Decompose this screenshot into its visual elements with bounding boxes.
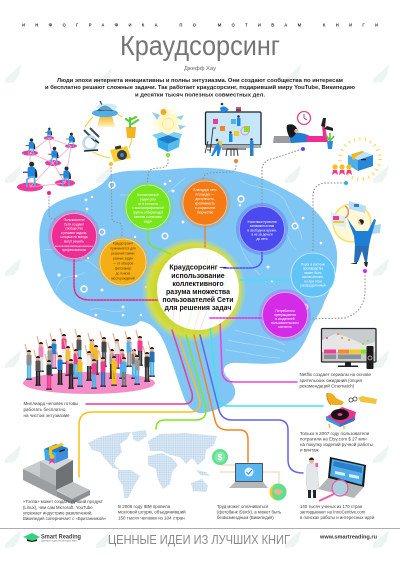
- brain circuit lines: [44, 178, 322, 358]
- panel: magenta circle: контента: [278, 325, 292, 329]
- panel: pink circle: сообщества: [65, 227, 83, 231]
- panel: yellow circle: решения самых: [111, 252, 135, 256]
- panel: violet circle: занимаются ими: [250, 224, 274, 228]
- central definition text: коллективного: [172, 281, 224, 288]
- colored leader lines: [79, 318, 323, 477]
- footer slogan: ЦЕННЫЕ ИДЕИ ИЗ ЛУЧШИХ КНИГ: [108, 533, 290, 547]
- panel: orange circle: [180, 178, 230, 228]
- icon: TV with chart: [322, 328, 376, 369]
- billion people note: работать бесплатно,: [24, 407, 67, 412]
- panel: pink circle: профессионалы: [62, 248, 87, 252]
- icon: ufo, cactus, camera, microscope cycle: [84, 101, 138, 162]
- pale fan lines: [172, 258, 228, 330]
- connector: network to pink circle: [49, 193, 60, 222]
- panel: yellow circle: Краудсорсинг: [113, 242, 134, 246]
- connector: icons to yellow circle: [111, 164, 122, 240]
- panel: yellow circle: применяется для: [110, 246, 136, 250]
- IBM note: В 2006 году IBM провела: [118, 504, 171, 509]
- Etsy note: на покупку изделий ручной работы: [300, 441, 373, 447]
- panel: green circle: Коллективный: [137, 193, 159, 197]
- central definition text: использование: [171, 273, 225, 280]
- panel: orange circle: доступность,: [195, 197, 215, 201]
- panel: cyan circle: но при этом: [304, 279, 322, 283]
- central definition text: для решения задач: [165, 305, 231, 312]
- InnoCentive note: 140 тысяч ученых из 170 стран: [300, 504, 363, 509]
- connector: screen to orange circle: [203, 162, 236, 180]
- Etsy note: и винтаж: [300, 448, 319, 453]
- icon: people network: [17, 128, 77, 192]
- panel: violet circle: до сети: [256, 237, 268, 241]
- panel: yellow circle: — от обзоров: [113, 262, 133, 266]
- logo: Smart Reading: [23, 533, 81, 542]
- icon: paid and free labour laptop: $: [218, 453, 223, 462]
- title: Краудсорсинг: [120, 30, 280, 61]
- Netflix note: Netflix создает сериалы на основе: [300, 372, 371, 377]
- Netflix note: зрительских ожиданий (опция: [300, 377, 363, 383]
- panel: orange circle: творчество: [197, 210, 213, 214]
- panel: orange circle: креативность: [195, 202, 215, 206]
- panel: green circle: группы отбирающей: [133, 211, 163, 215]
- panel: cyan circle: [291, 253, 335, 297]
- panel: orange circle: площадке —: [196, 192, 215, 196]
- panel: green circle: [122, 182, 174, 232]
- icon: big screen with workers: [205, 103, 261, 156]
- InnoCentive note: в поисках работы и интересных идей: [300, 515, 375, 520]
- panel: cyan circle: распределенный: [300, 284, 326, 288]
- InnoCentive note: заглядывают на InnoCentive.com: [300, 509, 366, 514]
- panel: magenta circle: превращаются: [274, 313, 296, 317]
- icon: scientist with laptop and magnifier: [306, 457, 366, 501]
- panel: yellow circle: месторождений: [111, 276, 135, 280]
- panel: pink circle: Сети создают: [64, 222, 85, 226]
- panel: violet circle: а не за деньги: [251, 233, 273, 237]
- panel: cyan circle: исключителен,: [302, 275, 324, 279]
- crowd product note: упрежает индустрию развлечений,: [23, 510, 92, 515]
- icon: woman with laptop and clock: [273, 112, 334, 149]
- intro text: [45, 77, 355, 99]
- icon: podium with box: [23, 443, 90, 504]
- billion people note: на чистом энтузиазме: [24, 413, 70, 418]
- labour note: безвозмездным (Википедия): [217, 515, 274, 520]
- panel: yellow circle: [96, 236, 150, 288]
- panel: pink circle: высококвалифицированные: [55, 244, 93, 248]
- crowd product note: (Linux), чем сам Microsoft. YouTube: [23, 505, 93, 510]
- website: www.smartreading.ru: [319, 534, 377, 540]
- panel: pink circle: могут решить: [64, 240, 84, 244]
- icon: turntable: [326, 393, 377, 429]
- panel: orange circle: и социальное: [195, 206, 215, 210]
- logo: Smart Reading: Ценные идеи из лучших книг: [41, 540, 77, 542]
- panel: green circle: разум сети: [140, 197, 156, 201]
- central definition text: разума множества: [166, 289, 230, 296]
- panel: orange circle: Благодаря сети: [194, 188, 217, 192]
- icon: box with medals and rays: [332, 139, 380, 179]
- crowd product note: «Толпа» может создать лучший продукт: [23, 499, 103, 504]
- panel: pink circle: и решают задачи,: [61, 231, 87, 235]
- Etsy note: потратили на Etsy.com $ 27 млн: [300, 437, 367, 442]
- IBM note: 150 тысяч человек из 104 стран: [118, 515, 185, 520]
- icon: lightbulb in box: [151, 106, 186, 152]
- brain shape: [39, 168, 337, 413]
- connector: bulb box to green circle: [147, 156, 168, 185]
- panel: violet circle: в свободное время,: [247, 228, 277, 232]
- panel: violet circle: [236, 203, 288, 255]
- connector: man to magenta circle: [310, 272, 365, 319]
- header tagline: ИНФОГРАФИКА ПО МОТИВАМ КНИГИ: [22, 22, 378, 28]
- connector: woman to violet circle: [262, 149, 302, 206]
- panel: yellow circle: фотокамер: [115, 266, 131, 270]
- connector: box to cyan circle: [313, 183, 345, 253]
- central definition text: пользователей Сети: [162, 296, 234, 304]
- icon: man with floating screens: [331, 201, 381, 267]
- panel: cyan circle: производства: [303, 267, 323, 271]
- panel: magenta circle: пользовательского: [271, 321, 299, 325]
- panel: magenta circle: в создателей: [275, 317, 295, 321]
- panel: pink circle: [48, 210, 100, 262]
- central white circle: [157, 248, 239, 330]
- panel: cyan circle: может быть: [304, 271, 322, 275]
- panel: pink circle: которые не всегда: [60, 235, 88, 239]
- panel: cyan circle: Порог в системе: [301, 262, 325, 266]
- IBM note: мозговой штурм, объединивший: [118, 509, 186, 515]
- Etsy note: Только в 2007 году пользователи: [300, 431, 370, 436]
- central definition text: Краудсорсинг —: [169, 264, 227, 272]
- panel: green circle: не в точности: [138, 202, 158, 206]
- world map: [88, 430, 217, 498]
- central halo: [142, 238, 246, 342]
- panel: green circle: мнения с мнением: [134, 215, 162, 219]
- labour note: (фотобанк iStock), а может быть: [217, 509, 282, 514]
- author: Джефф Хау: [184, 66, 216, 72]
- labour note: Труд может оплачиваться: [217, 504, 269, 509]
- intro text: Люди эпохи интернета инициативны и полны энтузиазма. Они создают сообщества по интересам: [57, 77, 343, 84]
- billion people note: Миллиард человек готовы: [24, 401, 78, 406]
- crowd of raised hands: [23, 328, 155, 394]
- panel: pink circle: Пользователи: [64, 218, 85, 222]
- colored dashed links: [74, 226, 289, 318]
- colored node dots: [47, 147, 367, 273]
- crowd product note: Википедия соперничает с «Британникой»: [23, 516, 107, 521]
- Netflix note: рекомендаций Cinematch): [300, 382, 355, 388]
- panel: magenta circle: Потребители: [275, 309, 295, 313]
- panel: yellow circle: до поиска: [116, 272, 131, 276]
- panel: violet circle: Участники проектов: [247, 220, 277, 224]
- logo: Smart Reading: Smart Reading: [41, 534, 81, 540]
- footer: [0, 528, 400, 547]
- panel: green circle: с высокопрофильной: [132, 206, 164, 210]
- panel: green circle: задач: [144, 219, 153, 223]
- panel: yellow circle: разных задач: [113, 256, 133, 260]
- intro text: и бесплатно решают сложные задачи. Так работает краудсорсинг, подаривший миру YouTube, Википедию: [45, 84, 355, 91]
- icon: paid and free labour laptop: [212, 449, 286, 500]
- panel: magenta circle: [259, 289, 311, 341]
- intro text: и десятки тысяч полезных совместных дел.: [135, 93, 265, 99]
